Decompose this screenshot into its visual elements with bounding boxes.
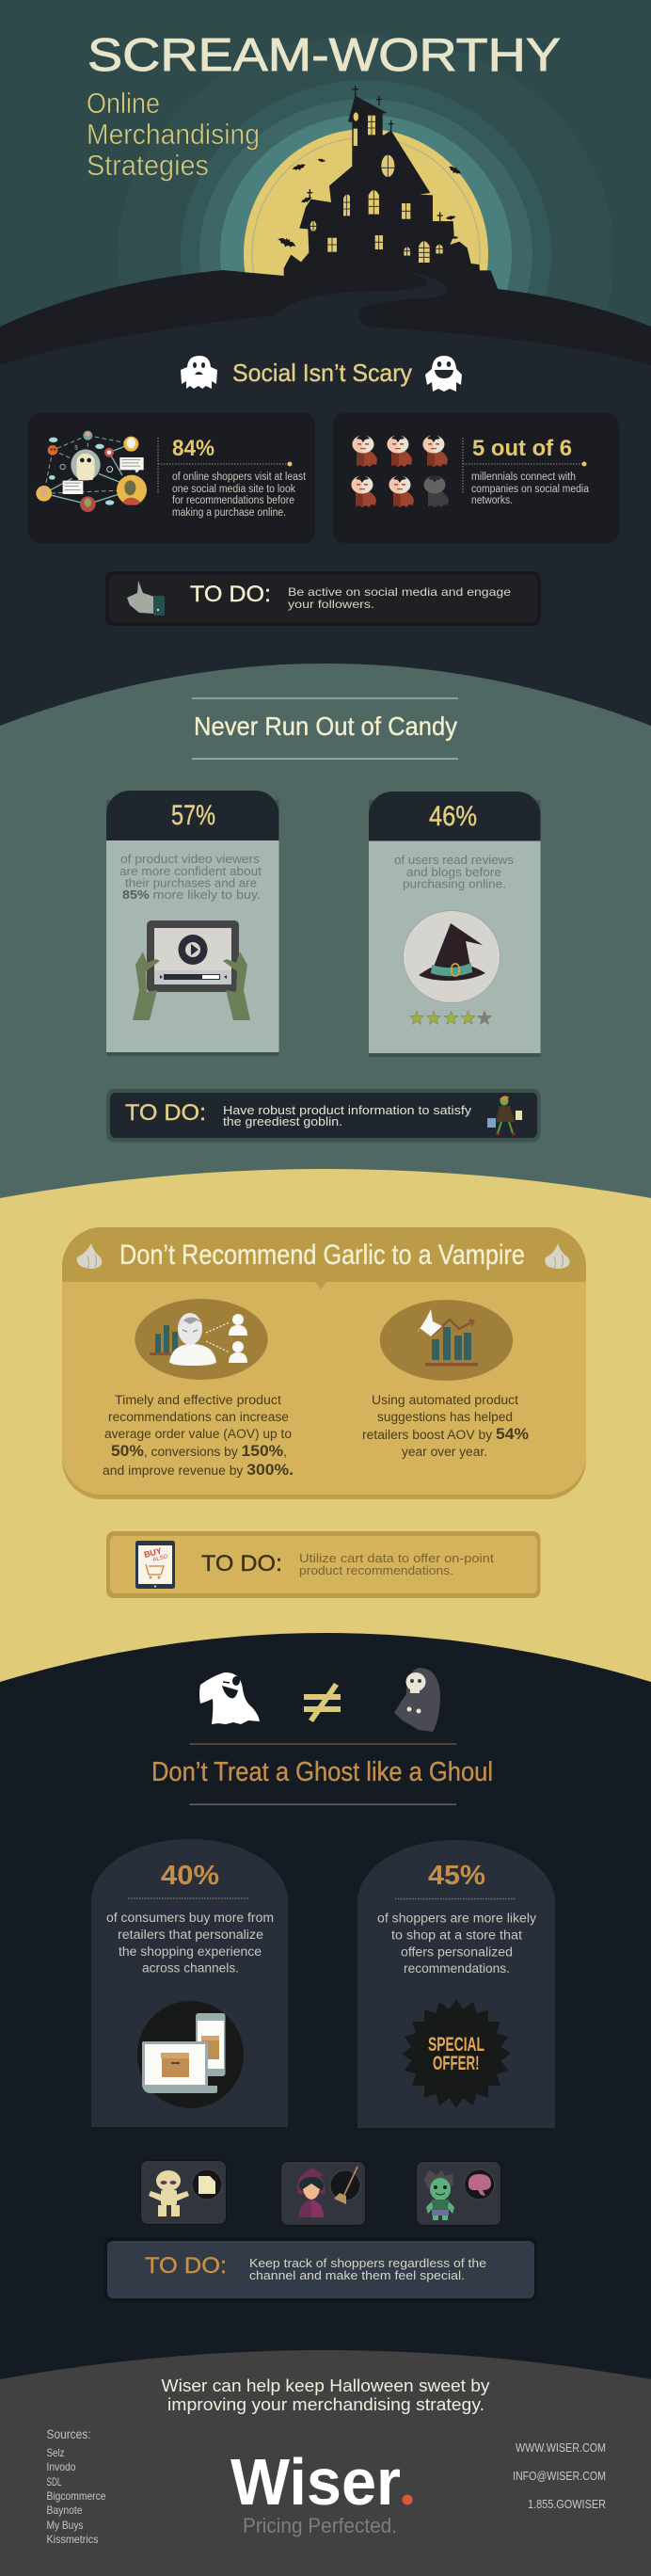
text block: across channels. (142, 1961, 239, 1975)
text block: channel and make them feel special. (249, 2269, 465, 2282)
text block: left: recommendations can increase (108, 1410, 289, 1424)
icon: tablet video in hands (133, 920, 250, 1020)
text block: of consumers buy more from (106, 1911, 274, 1925)
text block: recommendations. (404, 1961, 510, 1976)
callout: to do 3 (106, 1531, 540, 1598)
contact details: INFO@WISER.COM (513, 2469, 606, 2483)
icon: tablet buy also: BUY (143, 1546, 163, 1560)
windows (310, 112, 443, 263)
house silhouette (284, 96, 498, 295)
text block: the greediest goblin. (223, 1115, 342, 1128)
hands (133, 952, 250, 1020)
label: to do: TO DO: (201, 1551, 282, 1576)
text block: right: year over year. (402, 1445, 487, 1459)
closing message: Wiser can help keep Halloween sweet by (162, 2376, 489, 2395)
text block: for recommendations before (172, 495, 294, 506)
text block: 85% more likely to buy. (122, 888, 261, 902)
icon: devices with box (137, 2001, 244, 2108)
icon: not equal sign (304, 1683, 341, 1722)
panel: 57% card (106, 791, 278, 1056)
panel: mummy tile (140, 2160, 227, 2225)
label: to do: TO DO: (145, 2253, 227, 2279)
text block (106, 1911, 274, 1975)
heading: Don’t Recommend Garlic to a Vampire (119, 1240, 525, 1271)
text block (119, 852, 262, 902)
sources list: Bigcommerce (47, 2489, 106, 2503)
label: to do: TO DO: (125, 1100, 206, 1126)
icon: vampires pictogram (352, 435, 449, 507)
icon: growth chart thumbs up (380, 1300, 513, 1381)
heading: Don't Treat a Ghost like a Ghoul: Don’t Treat a Ghost like a Ghoul (151, 1757, 493, 1787)
icon: scared ghost (181, 356, 217, 389)
icon: vampire recommendations (135, 1299, 268, 1380)
callout: to do 2 (106, 1089, 540, 1143)
text block (249, 2257, 486, 2282)
subtitle: Merchandising (87, 118, 260, 151)
icon: special offer burst (402, 1999, 511, 2108)
window bars (310, 116, 443, 263)
moon with glowing rings (118, 36, 614, 472)
heading: Never Run Out of Candy: Never Run Out of Candy (194, 712, 457, 741)
icon: tablet buy also: ALSO (152, 1554, 168, 1563)
text block (299, 1552, 495, 1577)
panel: witch tile (280, 2161, 366, 2226)
sources list: Invodo (47, 2460, 76, 2473)
panel: zombie tile (416, 2161, 501, 2226)
text block: of online shoppers visit at least (172, 472, 307, 483)
text block: left: Timely and effective product (115, 1393, 281, 1407)
text block (394, 853, 515, 890)
text block: their purchases and are (125, 875, 257, 890)
text block: right: Using automated product (372, 1393, 518, 1407)
icon: winking ghost (199, 1672, 260, 1724)
stat: 5 out of 6: 5 out of 6 (472, 436, 572, 461)
text block: of product video viewers (120, 852, 261, 866)
text block: right (362, 1393, 529, 1459)
bats (276, 158, 463, 250)
icon: witch hat (403, 911, 500, 1003)
subtitle (87, 87, 260, 182)
crosses (307, 86, 443, 221)
text block: networks. (471, 495, 513, 506)
text block: to shop at a store that (391, 1928, 522, 1943)
text block: left: average order value (AOV) up to (104, 1427, 292, 1441)
rating stars (409, 1011, 492, 1024)
icon: grinning ghost (425, 356, 462, 392)
text block: Be active on social media and engage (288, 585, 511, 599)
icon: social network of monsters (36, 431, 147, 512)
sources list: My Buys (47, 2519, 83, 2532)
icon: toilet paper in circle (192, 2169, 222, 2200)
text block: Utilize cart data to offer on-point (299, 1552, 495, 1565)
text block: right: suggestions has helped (377, 1410, 513, 1424)
dotted divider (158, 438, 288, 494)
icon: brain in circle (465, 2169, 495, 2200)
panel: footer background (0, 2350, 651, 2576)
icon: witch (297, 2168, 325, 2217)
text block: and blogs before (406, 865, 501, 879)
text block (223, 1104, 472, 1128)
text block: companies on social media (471, 484, 590, 495)
tagline: Pricing Perfected. (243, 2514, 397, 2537)
panel: 40% tombstone card (91, 1839, 288, 2127)
text block: left: and improve revenue by 300%. (103, 1461, 294, 1479)
text block: Keep track of shoppers regardless of the (249, 2257, 486, 2270)
panel: 84% of online shoppers (28, 413, 315, 543)
text block: left: 50%, conversions by 150%, (111, 1442, 287, 1460)
text block: the shopping experience (119, 1944, 262, 1959)
text block: left (103, 1393, 294, 1479)
icon: mummy (149, 2170, 189, 2216)
icon: zombie (424, 2170, 454, 2220)
icon: garlic right (545, 1243, 570, 1269)
sources list: Selz (47, 2446, 64, 2459)
sources list: SDL (47, 2475, 62, 2488)
callout: to do 4 (103, 2237, 537, 2301)
closing message (162, 2376, 489, 2414)
subtitle: Online (87, 87, 160, 120)
panel: 5 out of 6 millennials (333, 413, 619, 543)
text block: retailers that personalize (118, 1928, 263, 1942)
title: SCREAM-WORTHY (87, 30, 561, 81)
icon: special offer burst: SPECIAL (428, 2034, 484, 2056)
stat: 40%: 40% (161, 1861, 219, 1891)
label: to do: TO DO: (190, 582, 271, 607)
text block: of users read reviews (394, 853, 515, 867)
icon: zombie thumbs up (127, 581, 165, 616)
text block: Have robust product information to satisfy (223, 1104, 472, 1117)
text block (288, 585, 511, 611)
dotted divider (463, 438, 582, 494)
icon: tablet buy also (135, 1541, 175, 1589)
text block: offers personalized (401, 1944, 513, 1960)
stat: 46%: 46% (429, 801, 477, 832)
icon: grim reaper ghoul (394, 1668, 440, 1732)
panel: Don't Recommend Garlic (62, 1227, 586, 1499)
text block (377, 1911, 536, 1976)
text block: are more confident about (119, 864, 262, 878)
text block: product recommendations. (299, 1564, 453, 1577)
text block: right: retailers boost AOV by 54% (362, 1425, 529, 1443)
sources list: Sources: (47, 2426, 90, 2441)
text block: purchasing online. (403, 877, 506, 890)
panel: 45% tombstone card (357, 1840, 555, 2128)
icon: broom in circle (330, 2167, 360, 2204)
text block: millennials connect with (471, 472, 576, 483)
logo: Wiser: Wiser (230, 2445, 401, 2519)
text block (471, 472, 590, 506)
subtitle: Strategies (87, 149, 209, 182)
sources list: Kissmetrics (47, 2533, 98, 2546)
text block: your followers. (288, 598, 374, 611)
panel: section Don't Treat a Ghost background (0, 1633, 651, 2409)
contact details (513, 2440, 606, 2511)
text block: making a purchase online. (172, 507, 286, 519)
sources list: Baynote (47, 2504, 83, 2517)
panel: section Don't Recommend Garlic background (0, 1169, 651, 1694)
icon: social network of monsters: $ (74, 445, 78, 451)
text block: of shoppers are more likely (377, 1911, 536, 1926)
sources list (47, 2426, 106, 2546)
stat: 57%: 57% (171, 800, 215, 831)
text block (172, 472, 307, 519)
stat: 45%: 45% (428, 1861, 485, 1891)
contact details: WWW.WISER.COM (516, 2440, 606, 2455)
icon: special offer burst: OFFER! (433, 2053, 480, 2074)
hill (0, 270, 651, 395)
closing message: improving your merchandising strategy. (167, 2395, 484, 2414)
heading: Social Isn't Scary: Social Isn’t Scary (232, 359, 412, 387)
panel: section Social Isn't Scary background with road (0, 272, 651, 753)
callout: to do 1 (105, 571, 541, 626)
panel: 46% card (369, 792, 540, 1057)
text block: one social media site to look (172, 484, 295, 495)
icon: goblin shopper (487, 1096, 522, 1134)
panel: section Never Run Out of Candy background (0, 664, 651, 1242)
haunted house (276, 86, 498, 295)
icon: garlic left (77, 1243, 102, 1269)
contact details: 1.855.GOWISER (528, 2497, 606, 2511)
stat: 84%: 84% (172, 436, 214, 461)
header background (0, 0, 651, 395)
